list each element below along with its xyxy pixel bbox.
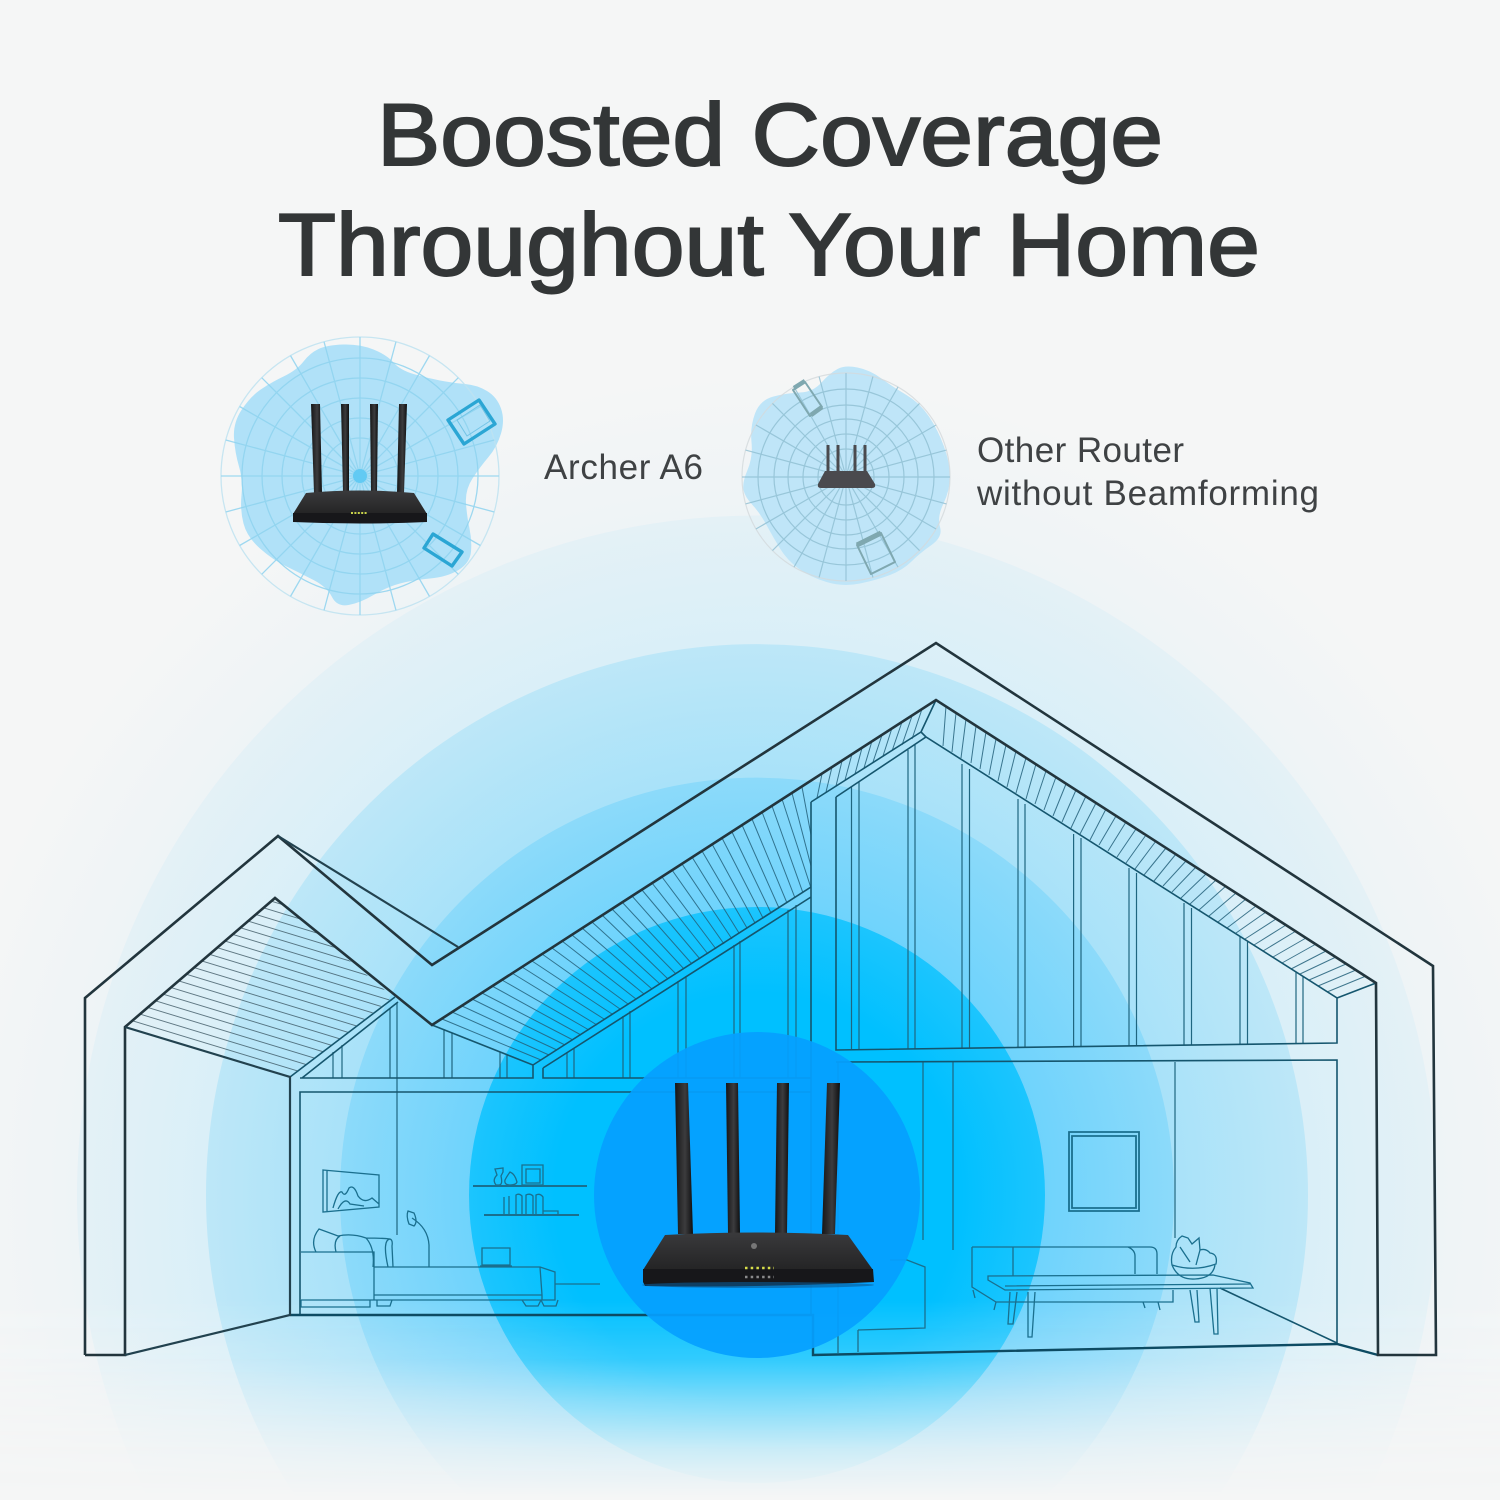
signal coverage rings xyxy=(77,516,1437,1483)
furniture: left living room xyxy=(301,1165,600,1307)
icon: small router xyxy=(293,404,427,524)
central router glow circle xyxy=(594,1032,920,1358)
coffee table xyxy=(988,1275,1253,1337)
panel: other router coverage diagram xyxy=(742,367,950,585)
title: Throughout Your Home xyxy=(278,195,1260,294)
icon: tablet xyxy=(448,400,495,444)
floor lamp xyxy=(407,1211,429,1267)
left gable hatching xyxy=(134,901,390,1071)
control buttons xyxy=(745,1276,774,1278)
roof valley and gable edges xyxy=(125,836,458,1355)
router body xyxy=(643,1232,873,1270)
fruit bowl xyxy=(1172,1236,1216,1279)
sofa xyxy=(972,1247,1173,1310)
armchair xyxy=(858,1260,925,1330)
sofa and cushions xyxy=(301,1229,558,1307)
title: Boosted Coverage xyxy=(377,85,1163,184)
icon: phone xyxy=(424,534,462,566)
house line illustration xyxy=(85,643,1436,1355)
framed picture xyxy=(1069,1132,1139,1211)
interior wall studs xyxy=(333,745,1303,1353)
panel: Archer A6 coverage diagram xyxy=(221,337,503,615)
icon: main router xyxy=(642,1083,874,1288)
status LEDs xyxy=(745,1267,774,1269)
label: Archer A6: Archer A6 xyxy=(544,448,703,487)
wall shelves xyxy=(473,1186,587,1215)
furniture: right living room xyxy=(858,1132,1253,1337)
roof rafters xyxy=(442,706,1366,1060)
title xyxy=(278,85,1260,294)
polar grid: other router xyxy=(742,373,950,581)
icon: generic router silhouette xyxy=(818,445,875,488)
label: other router: without Beamforming xyxy=(976,474,1319,513)
grid centre glow xyxy=(353,469,367,483)
interior structure lines xyxy=(290,700,1376,1343)
antennas xyxy=(675,1083,840,1234)
wall picture xyxy=(323,1170,379,1212)
laptop xyxy=(480,1248,512,1266)
coverage blob: other router xyxy=(743,367,950,585)
logo mark xyxy=(751,1243,757,1249)
icon: grey phone xyxy=(793,381,822,416)
outer house outline xyxy=(85,643,1436,1355)
polar grid: Archer A6 xyxy=(221,337,499,615)
icon: grey tablet xyxy=(857,533,895,574)
floor lines xyxy=(290,1315,1378,1355)
coverage blob: Archer A6 xyxy=(234,344,503,605)
label: other router xyxy=(976,431,1319,513)
label: other router: Other Router xyxy=(977,431,1184,470)
